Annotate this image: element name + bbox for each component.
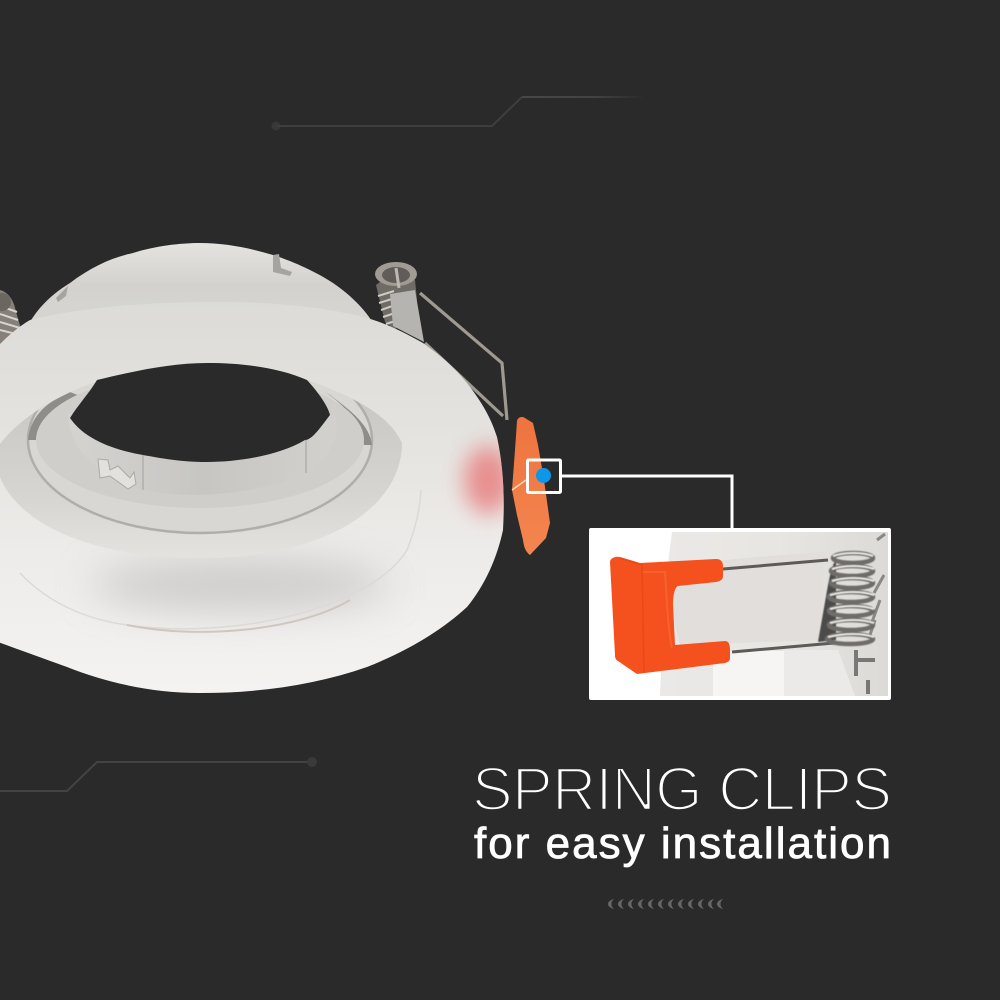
spring coil [818,553,874,644]
decorative circuit line: top [272,97,645,130]
decorative circuit line: bottom left [0,757,317,791]
latch detail [98,459,136,489]
connector line [562,476,732,529]
infographic canvas [0,96,891,909]
wires [723,560,834,652]
orange plastic tab [610,557,730,674]
heading line 2: for easy installation: for easy installation [474,819,891,868]
heading line 1: SPRING CLIPS: SPRING CLIPS [472,755,892,823]
orange clip [512,417,550,555]
wire loop [420,293,507,420]
rear ring [30,243,377,345]
heading [472,755,892,868]
product photo: recessed downlight fitting [0,243,550,693]
left spring [0,290,22,345]
decorative chevron row [608,899,723,909]
hole interior [70,363,330,462]
inner cylinder wall [68,414,337,495]
printed marks [856,650,875,694]
glow from clip and shading on flange [90,446,512,611]
lower bezel line [20,490,421,629]
opening with tilting gimbal [0,365,402,550]
right spring and bracket [375,262,424,342]
inset photo: spring clip close-up [589,528,891,700]
callout marker [528,460,560,492]
flange [0,302,504,693]
fitting body [660,532,888,696]
